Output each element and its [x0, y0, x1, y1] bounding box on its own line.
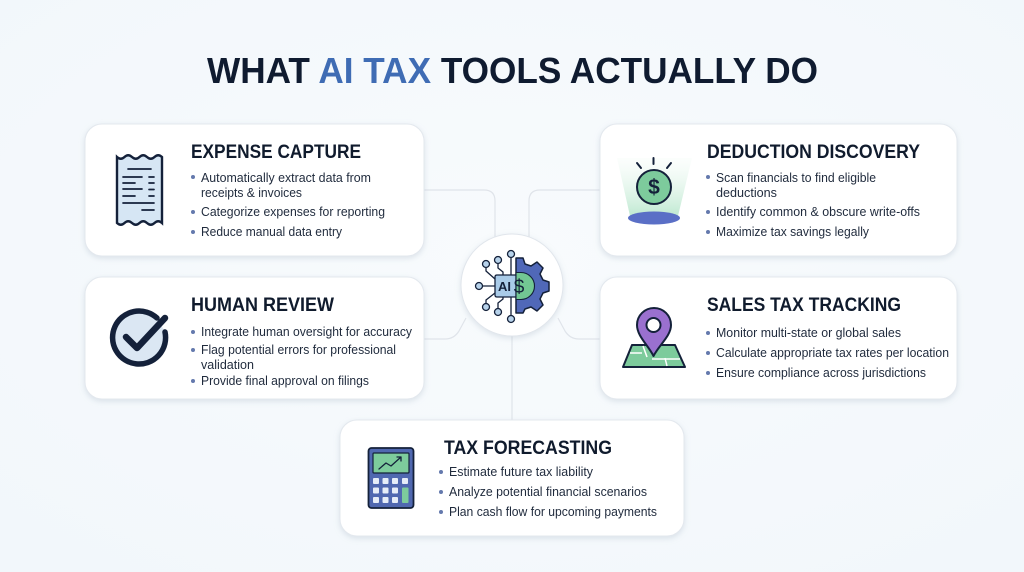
bullet list: Calculate appropriate tax rates per location [716, 345, 949, 360]
heading: SALES TAX TRACKING [707, 294, 901, 316]
icon: receipt [117, 155, 162, 225]
bullet list: Flag potential errors for professional [201, 342, 396, 357]
chip with AI and dollar [495, 275, 516, 297]
bullet list [191, 324, 412, 388]
bullet list: Ensure compliance across jurisdictions [716, 365, 926, 380]
bullet list [191, 170, 385, 239]
icon: spotlight coin [617, 158, 692, 224]
icon: map pin [623, 308, 685, 367]
connector lines [424, 190, 600, 420]
circuit traces [476, 250, 514, 322]
heading: HUMAN REVIEW [191, 294, 335, 316]
central hub: AI gear icon: AI [498, 279, 511, 294]
central hub: AI gear icon [461, 234, 563, 336]
icon: gear half [516, 258, 549, 313]
panel: sales tax tracking [600, 277, 957, 399]
icon: check mark [113, 311, 166, 364]
heading: TAX FORECASTING [444, 437, 612, 459]
bullet list: Provide final approval on filings [201, 373, 369, 388]
bullet list: Maximize tax savings legally [716, 224, 869, 239]
panel: deduction discovery [600, 124, 957, 256]
bullet list: Plan cash flow for upcoming payments [449, 504, 657, 519]
panel: human review [85, 277, 424, 399]
bullet list: Estimate future tax liability [449, 464, 593, 479]
bullet list: Integrate human oversight for accuracy [201, 324, 412, 339]
bullet list: Automatically extract data from [201, 170, 371, 185]
central hub: AI gear icon: $ [514, 277, 525, 298]
bullet list: Scan financials to find eligible [716, 170, 876, 185]
heading: EXPENSE CAPTURE [191, 141, 361, 163]
panel: expense capture [85, 124, 424, 256]
bullet list [706, 170, 920, 239]
bullet list: validation [201, 357, 254, 372]
title: WHAT AI TAX TOOLS ACTUALLY DO [207, 50, 818, 91]
bullet list: Monitor multi-state or global sales [716, 325, 901, 340]
bullet list: Categorize expenses for reporting [201, 204, 385, 219]
bullet list [706, 325, 949, 380]
bullet list: deductions [716, 185, 777, 200]
bullet list: Analyze potential financial scenarios [449, 484, 647, 499]
bullet list: receipts & invoices [201, 185, 302, 200]
heading: DEDUCTION DISCOVERY [707, 141, 920, 163]
panel: tax forecasting [340, 420, 684, 536]
bullet list [439, 464, 657, 519]
bullet list: Reduce manual data entry [201, 224, 342, 239]
icon: spotlight coin: $ [648, 176, 660, 199]
bullet list: Identify common & obscure write-offs [716, 204, 920, 219]
icon: calculator [368, 448, 414, 508]
